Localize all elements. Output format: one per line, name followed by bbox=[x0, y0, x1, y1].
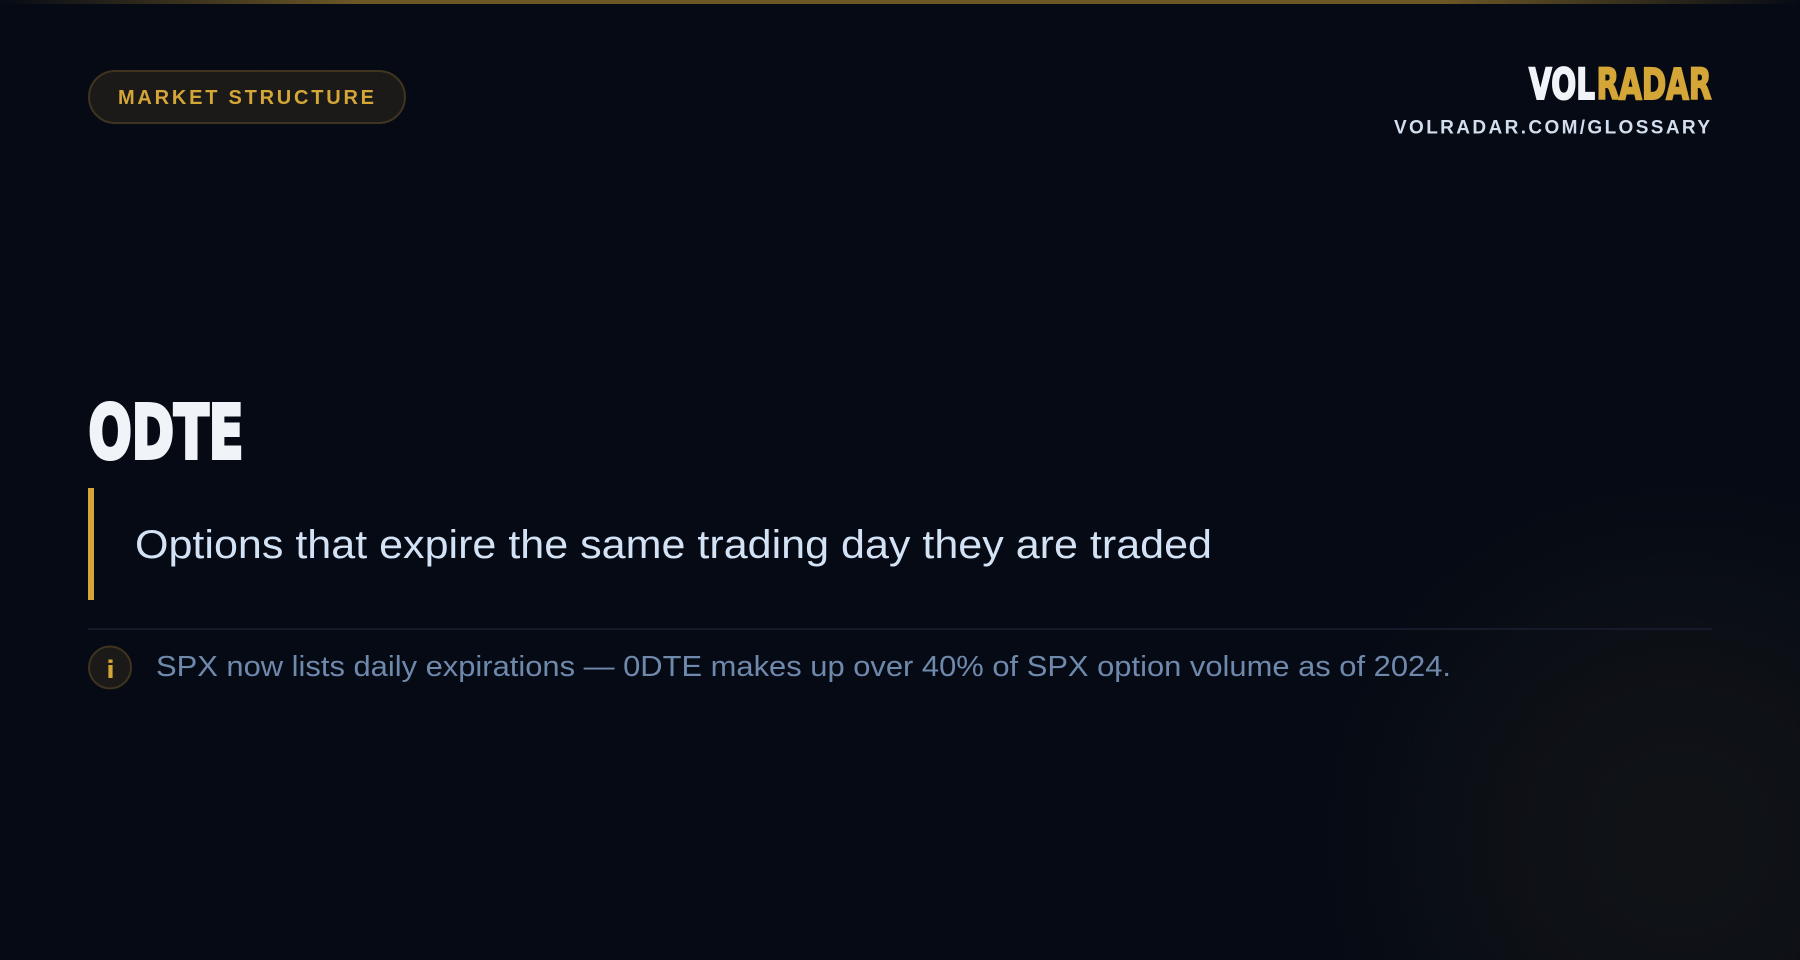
term title: ODTE bbox=[88, 390, 244, 476]
icon: info: i bbox=[106, 656, 115, 684]
glossary url: VOLRADAR.COM/GLOSSARY bbox=[1394, 118, 1710, 138]
definition text: Options that expire the same trading day they are traded bbox=[135, 523, 1212, 567]
icon: info bbox=[89, 646, 131, 688]
definition block bbox=[88, 488, 1212, 600]
logo wordmark: RADAR bbox=[1596, 61, 1712, 110]
brand logo and url bbox=[1394, 61, 1712, 138]
fact note bbox=[89, 646, 1451, 688]
category tag pill: MARKET STRUCTURE bbox=[118, 87, 374, 109]
category tag pill bbox=[89, 71, 405, 123]
note text: SPX now lists daily expirations — 0DTE makes up over 40% of SPX option volume as of 2024. bbox=[156, 651, 1451, 683]
accent bar bbox=[88, 488, 94, 600]
logo wordmark bbox=[1529, 61, 1712, 110]
logo wordmark: VOL bbox=[1529, 61, 1595, 110]
